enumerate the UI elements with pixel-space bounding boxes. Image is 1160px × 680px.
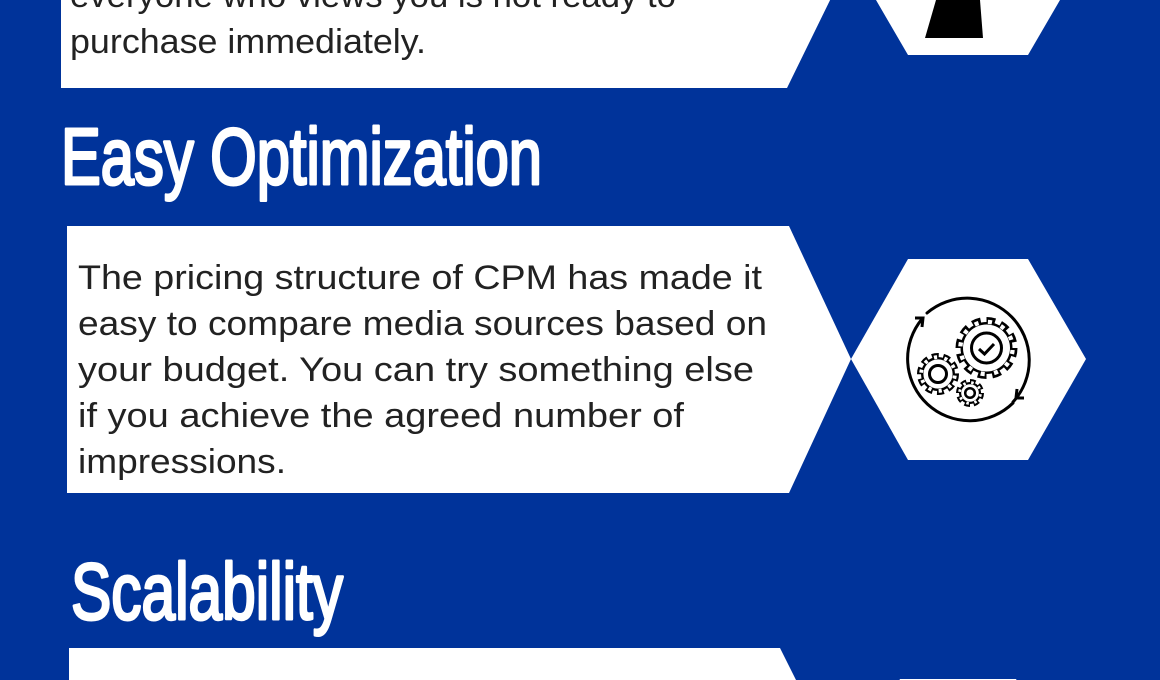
- heading: Scalability: Scalability: [71, 547, 343, 636]
- panel: top text card: purchase immediately.: [70, 23, 426, 61]
- small gear: [958, 382, 982, 404]
- panel: Easy Optimization text card: easy to compare media sources based on: [78, 305, 767, 343]
- panel: top text card: [61, 0, 835, 88]
- large gear: [959, 320, 1014, 376]
- panel: Easy Optimization text card: impressions.: [78, 443, 286, 481]
- panel: Easy Optimization text card: The pricing structure of CPM has made it: [78, 259, 763, 297]
- panel: Easy Optimization text card: [67, 226, 851, 493]
- panel: Scalability text card: [69, 648, 801, 680]
- icon: gears in a cycle: [908, 298, 1029, 421]
- heading: Easy Optimization: Easy Optimization: [61, 112, 542, 201]
- medium gear: [920, 356, 956, 392]
- panel: Scalability hexagon: [894, 679, 1022, 680]
- panel: top hexagon with icon: [876, 0, 1060, 55]
- panel: Easy Optimization text card: your budget. You can try something else: [78, 351, 754, 389]
- panel: Easy Optimization hexagon: [851, 259, 1086, 460]
- panel: Easy Optimization text card: if you achieve the agreed number of: [78, 397, 685, 435]
